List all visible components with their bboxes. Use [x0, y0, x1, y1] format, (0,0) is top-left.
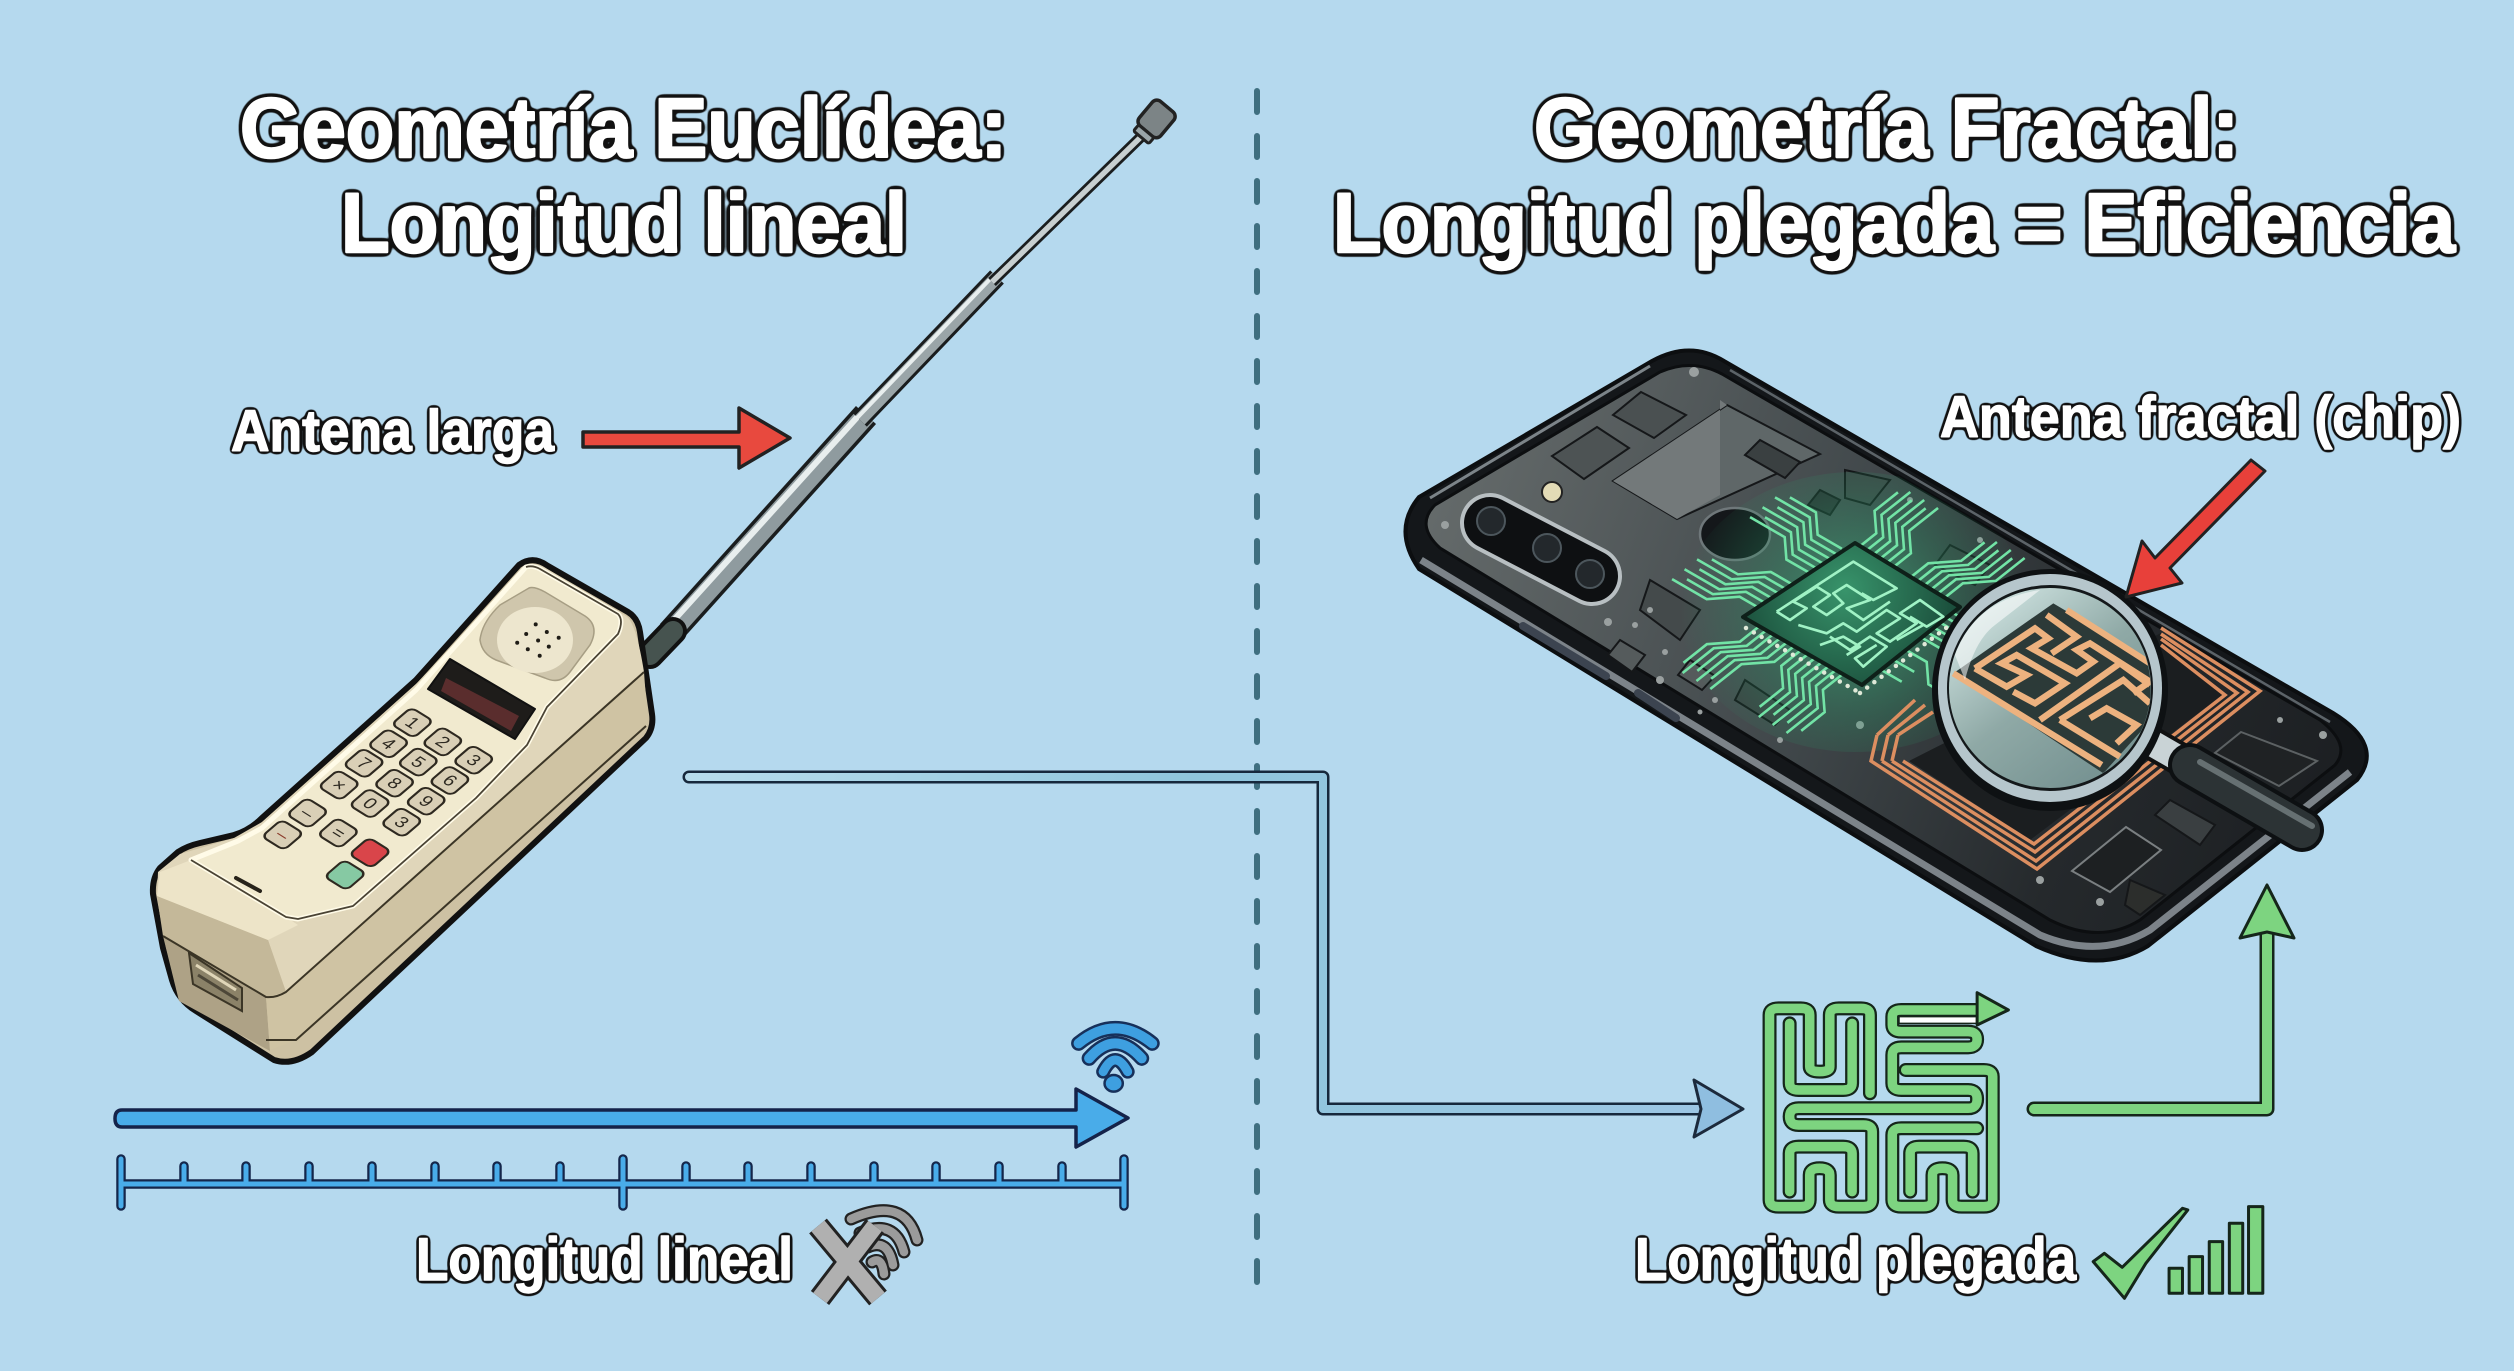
icon: telescopic antenna [650, 98, 1178, 655]
side buttons [1523, 626, 1676, 718]
keypad: 2 [431, 733, 455, 751]
title: Geometría Fractal: Longitud plegada = Eficiencia [1333, 176, 2456, 270]
icon: wifi signal [1079, 1028, 1152, 1092]
arrow: green to smartphone [2034, 885, 2294, 1109]
icon: folded fractal antenna [1770, 993, 2008, 1207]
keypad: = [326, 824, 350, 842]
keypad: – [296, 804, 319, 822]
keypad: – [271, 826, 295, 844]
icon: earpiece [480, 588, 594, 680]
icon: crossed-out wifi [818, 1211, 917, 1298]
central dashed divider [1254, 91, 1260, 1283]
keypad: 7 [352, 754, 376, 772]
title: Geometría Fractal [1333, 81, 2456, 270]
panel: Euclidean geometry [115, 81, 1178, 1298]
connector arrow: linear to fractal [689, 777, 1743, 1137]
keypad: × [327, 776, 351, 794]
label: Antena fractal (chip): Antena fractal (chip) [1940, 385, 2461, 450]
arrow: red pointing to lens [2126, 460, 2265, 597]
lens maze [1953, 603, 2160, 773]
icon: check mark and signal bars [2093, 1207, 2263, 1298]
title: Geometría Euclídea: Geometría Euclídea: [240, 81, 1007, 175]
copper antenna traces [1871, 628, 2260, 869]
lens highlight [1955, 590, 2040, 680]
lens [1932, 569, 2168, 811]
label: Longitud plegada: Longitud plegada [1635, 1226, 2077, 1293]
keypad: 1 [401, 714, 424, 732]
title: Geometría Euclídea: Longitud lineal [341, 176, 907, 270]
keypad: 5 [406, 753, 430, 771]
keypad: 3 [462, 751, 486, 769]
keypad: 9 [414, 792, 438, 810]
keypad: 4 [377, 735, 400, 753]
arrow: long blue linear arrow [115, 1089, 1128, 1147]
green circuit glow [1696, 472, 2006, 752]
green circuit traces [1608, 449, 2096, 780]
icon: magnifying glass over fractal antenna [1932, 569, 2312, 830]
fingerprint reader [1700, 508, 1770, 560]
icon: smartphone with transparent back [1406, 350, 2367, 960]
keypad: 3 [390, 813, 414, 831]
components on board [1552, 392, 2317, 915]
panel: fractal geometry [1333, 81, 2461, 1298]
keypad [262, 707, 495, 890]
keypad: 8 [383, 774, 406, 792]
icon: microphone slot [236, 878, 260, 891]
keypad: 6 [438, 771, 462, 790]
label: Longitud lineal: Longitud lineal [416, 1226, 793, 1293]
ruler scale [121, 1159, 1124, 1206]
label: Antena larga: Antena larga [231, 399, 555, 464]
icon: connector port [189, 953, 242, 1011]
title: Geometría Fractal: Geometría Fractal: [1534, 81, 2239, 175]
central chip with fractal maze [1743, 543, 1960, 693]
icon: brick mobile phone [153, 560, 652, 1062]
keypad: 0 [358, 794, 382, 813]
title: Geometría Euclídea [240, 81, 1007, 270]
arrow: red pointing to antenna [583, 408, 790, 468]
flash [1542, 482, 1562, 502]
icon: display [428, 659, 535, 739]
camera module [1477, 507, 1604, 588]
handle [2150, 742, 2312, 830]
